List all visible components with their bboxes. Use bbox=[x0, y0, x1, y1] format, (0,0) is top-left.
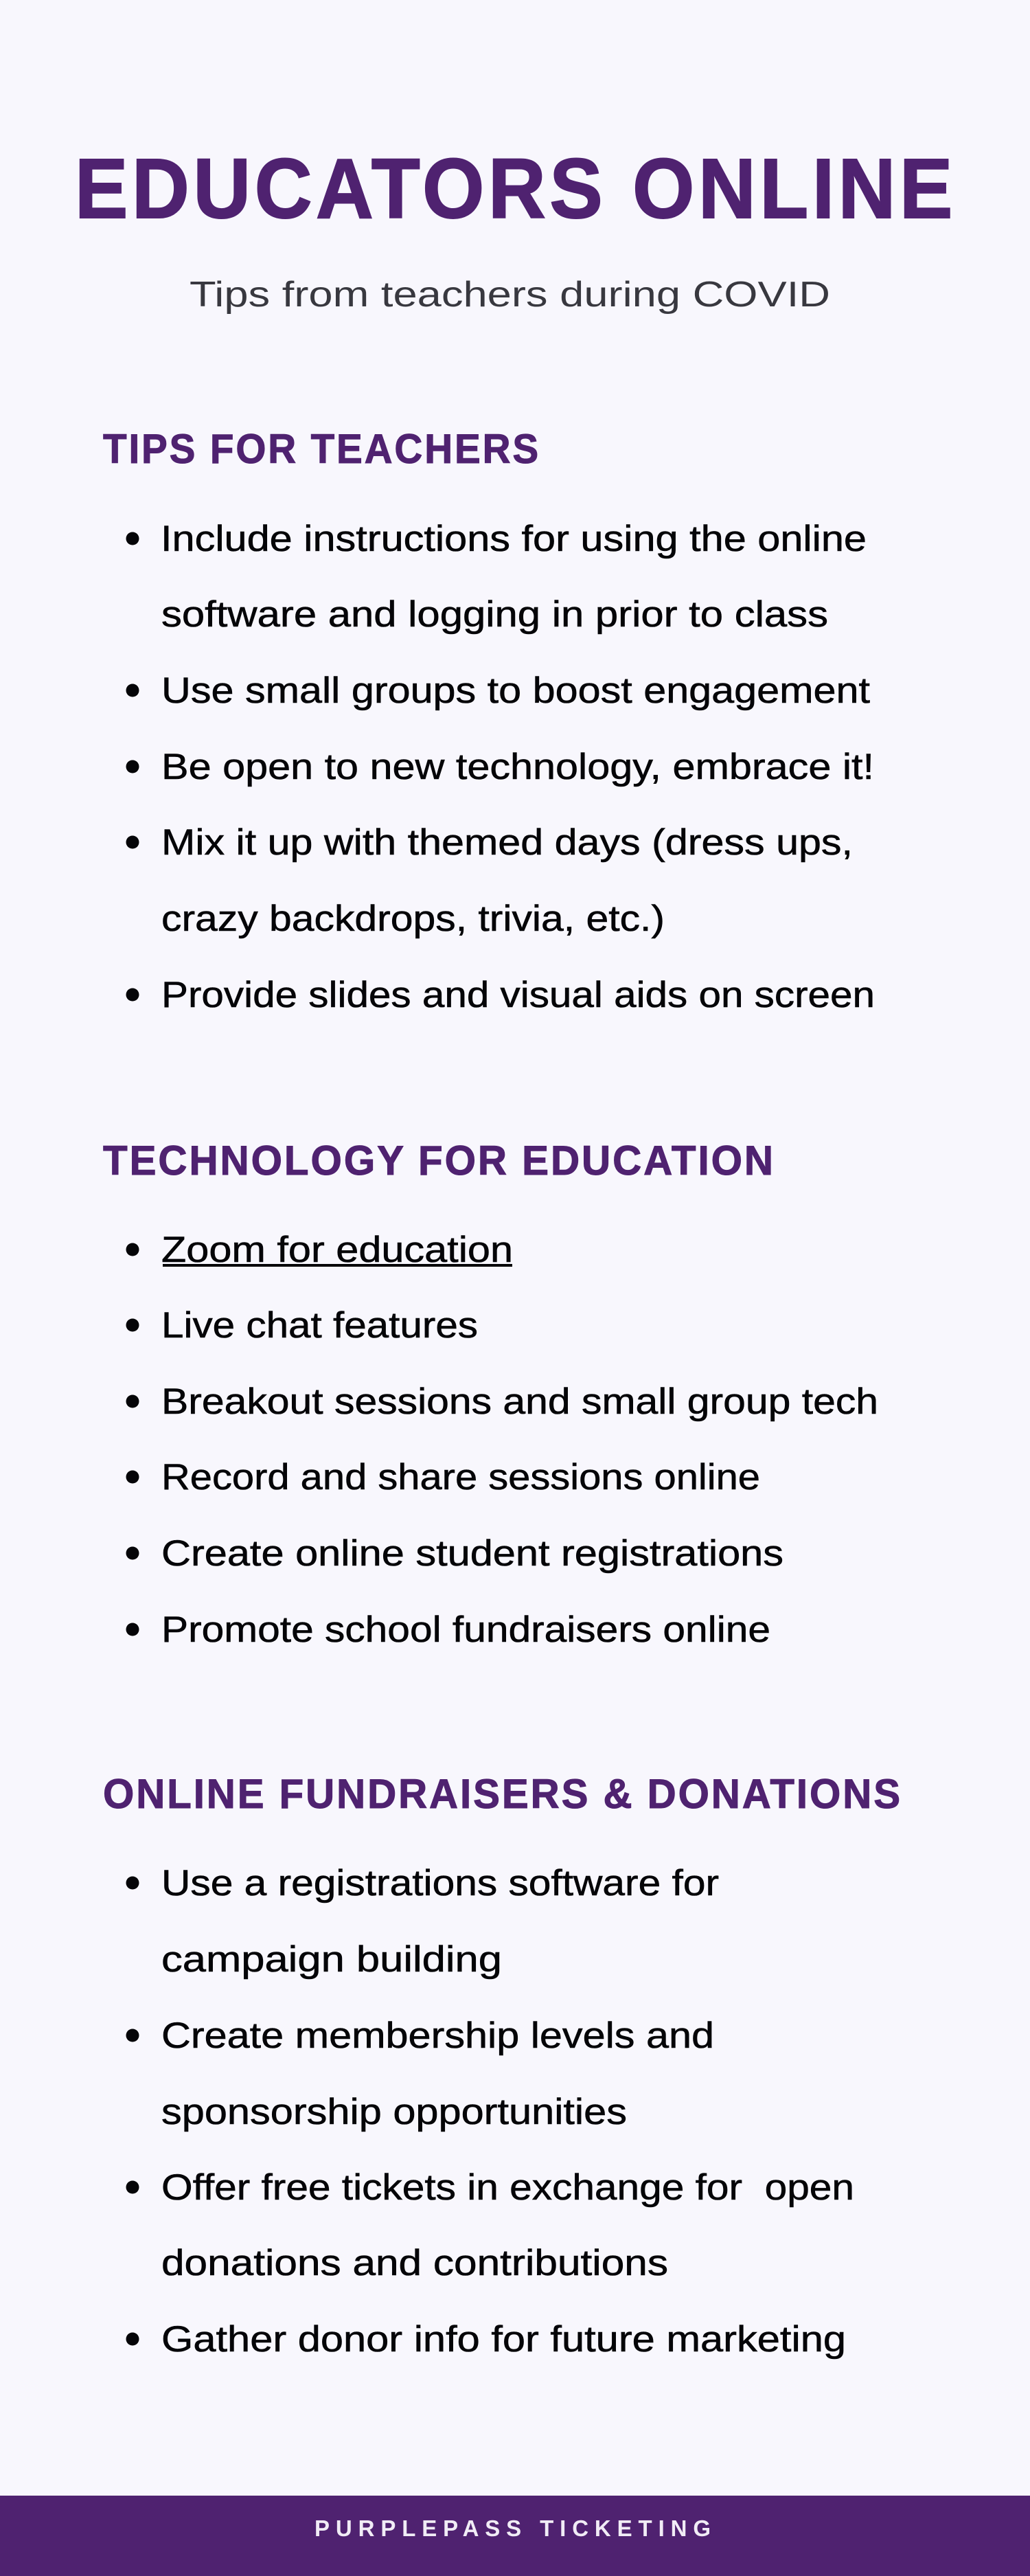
bullet: donor info: Gather donor info for future marketing bbox=[161, 2319, 846, 2360]
bullet: registrations software: Use a registrations software for bbox=[161, 1863, 719, 1903]
subtitle: Tips from teachers during COVID bbox=[190, 275, 830, 315]
bullet: free tickets bbox=[126, 2167, 854, 2283]
bullet: breakout sessions: Breakout sessions and small group tech bbox=[161, 1381, 878, 1422]
bullet: membership levels: Create membership levels and bbox=[161, 2015, 714, 2056]
bullet: small groups: Use small groups to boost engagement bbox=[161, 670, 870, 711]
bullet: record and share: Record and share sessions online bbox=[161, 1457, 760, 1498]
bullet: themed days: crazy backdrops, trivia, etc.) bbox=[161, 899, 665, 939]
bullet: free tickets: Offer free tickets in exchange for open bbox=[161, 2167, 854, 2208]
bullet: online instructions bbox=[126, 519, 867, 635]
panel: online fundraisers and donations bbox=[103, 1771, 902, 2360]
heading: online fundraisers and donations: ONLINE FUNDRAISERS & DONATIONS bbox=[103, 1771, 902, 1817]
heading: technology for education: TECHNOLOGY FOR EDUCATION bbox=[103, 1138, 775, 1184]
bullet: slides and visual aids: Provide slides and visual aids on screen bbox=[161, 975, 875, 1015]
bullet: membership levels bbox=[126, 2015, 714, 2132]
bullet: free tickets: donations and contributions bbox=[161, 2243, 668, 2283]
title: EDUCATORS ONLINE bbox=[75, 142, 957, 236]
bullet: new technology: Be open to new technology, embrace it! bbox=[161, 747, 874, 787]
panel: technology for education bbox=[103, 1138, 878, 1650]
bullet: online instructions: software and logging in prior to class bbox=[161, 594, 828, 635]
bullet: registrations software bbox=[126, 1863, 719, 1980]
bullet: themed days bbox=[126, 822, 853, 939]
footer text: PURPLEPASS TICKETING bbox=[314, 2516, 711, 2541]
panel: tips for teachers bbox=[103, 426, 875, 1015]
bullet: live chat: Live chat features bbox=[161, 1305, 478, 1346]
bullet: zoom for education link: Zoom for education bbox=[161, 1230, 513, 1270]
heading: tips for teachers: TIPS FOR TEACHERS bbox=[103, 426, 540, 472]
bullet: themed days: Mix it up with themed days (dress ups, bbox=[161, 822, 853, 863]
bullet: student registrations: Create online student registrations bbox=[161, 1533, 783, 1574]
footer bar bbox=[0, 2496, 1030, 2576]
bullet: school fundraisers: Promote school fundraisers online bbox=[161, 1609, 770, 1650]
bullet: online instructions: Include instructions for using the online bbox=[161, 519, 867, 559]
bullet: membership levels: sponsorship opportunities bbox=[161, 2092, 627, 2132]
bullet: registrations software: campaign building bbox=[161, 1939, 502, 1980]
